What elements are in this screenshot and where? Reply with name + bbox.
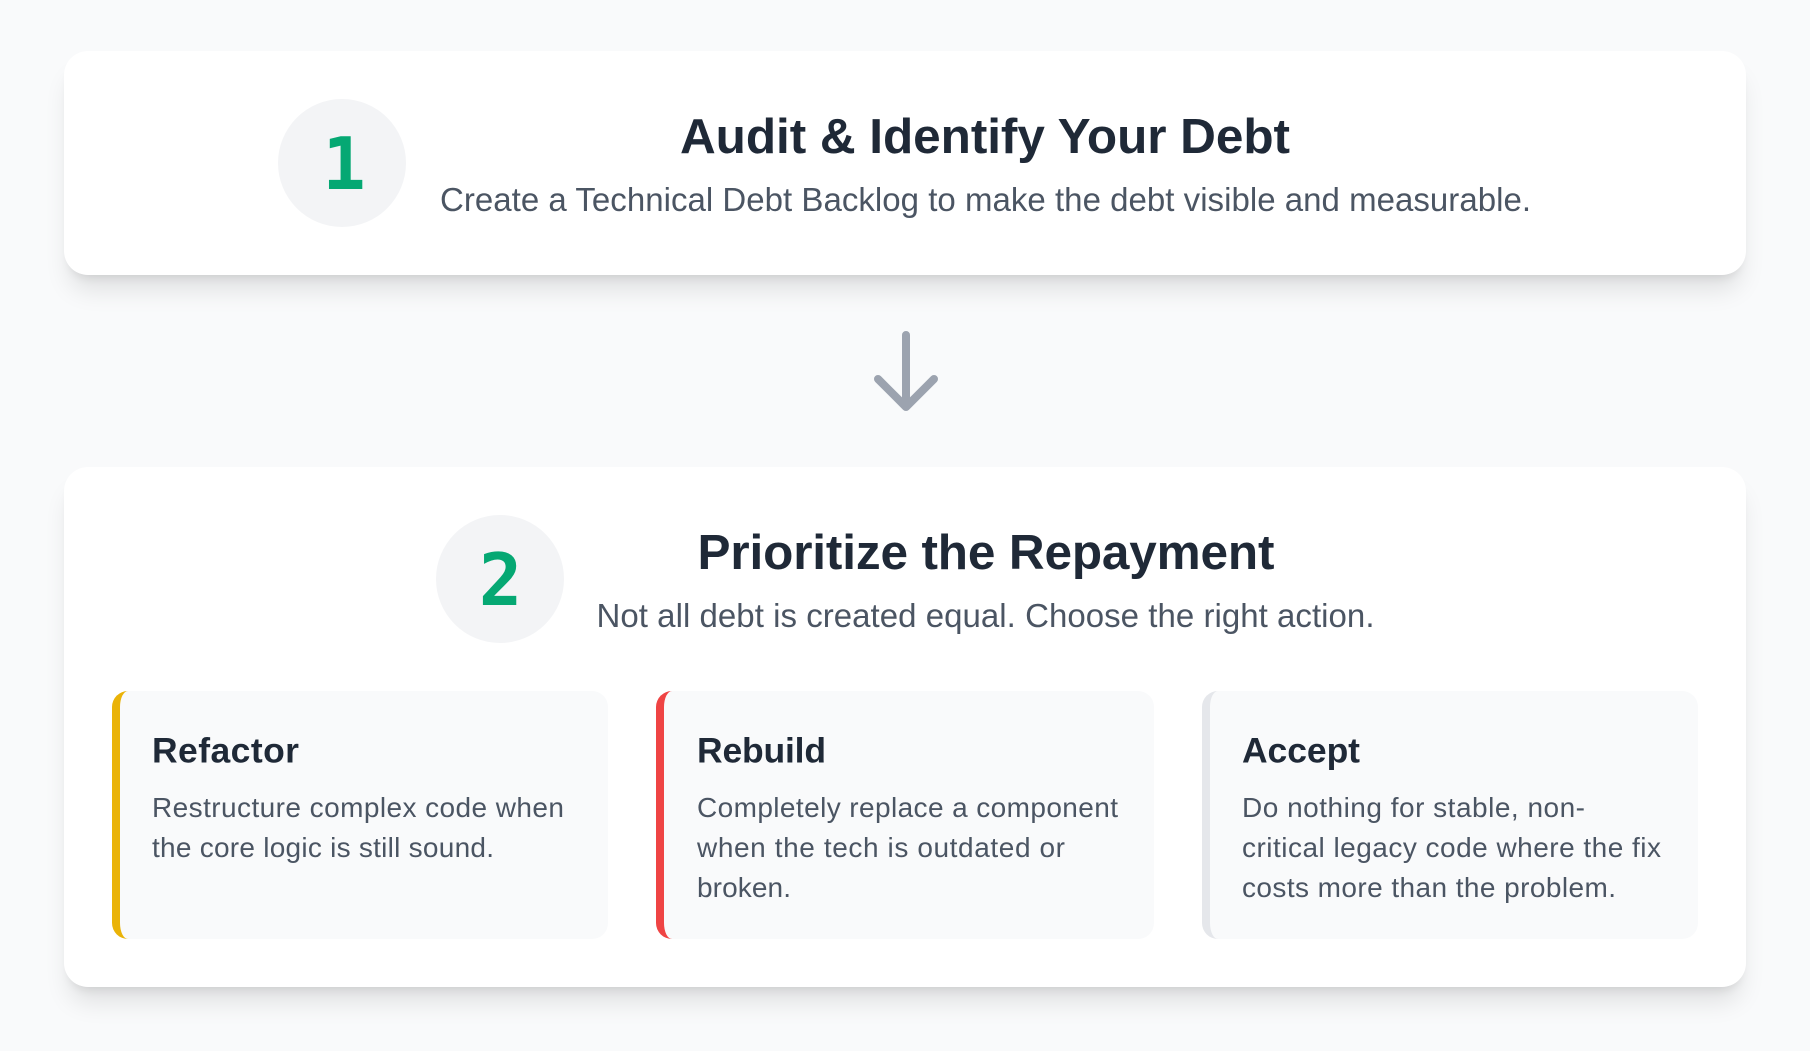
step 2 number badge bbox=[436, 515, 564, 643]
card: refactor bbox=[112, 691, 608, 939]
step 1 number badge: 1 bbox=[322, 122, 366, 206]
card heading: Accept: Accept bbox=[1242, 730, 1360, 770]
step 2 number badge: 2 bbox=[479, 538, 522, 622]
card body: refactor: the core logic is still sound. bbox=[152, 832, 494, 863]
heading: Audit & Identify Your Debt: Audit & Identify Your Debt bbox=[680, 109, 1290, 164]
card body: refactor bbox=[152, 792, 564, 863]
card body: rebuild bbox=[696, 792, 1118, 903]
panel: step 2 prioritize the repayment bbox=[64, 467, 1746, 987]
card body: refactor: Restructure complex code when bbox=[152, 792, 564, 823]
card body: rebuild: Completely replace a component bbox=[697, 792, 1118, 823]
card body: accept: Do nothing for stable, non- bbox=[1242, 792, 1585, 823]
text: step 2 description: Not all debt is created equal. Choose the right action. bbox=[596, 597, 1374, 634]
heading: Prioritize the Repayment: Prioritize the Repayment bbox=[698, 525, 1274, 580]
card heading: Rebuild: Rebuild bbox=[697, 730, 826, 770]
card body: accept bbox=[1242, 792, 1661, 903]
card: accept bbox=[1202, 691, 1698, 939]
step 1 number badge bbox=[278, 99, 406, 227]
card: rebuild bbox=[656, 691, 1154, 939]
card body: accept: critical legacy code where the fix bbox=[1242, 832, 1661, 863]
text: step 1 description: Create a Technical Debt Backlog to make the debt visible and measurable. bbox=[440, 181, 1531, 218]
card body: rebuild: when the tech is outdated or bbox=[696, 832, 1065, 863]
card body: rebuild: broken. bbox=[697, 872, 791, 903]
card heading: Refactor: Refactor bbox=[152, 730, 299, 770]
card body: accept: costs more than the problem. bbox=[1242, 872, 1616, 903]
arrow: down from step 1 to step 2 bbox=[874, 331, 938, 411]
panel: step 1 audit and identify bbox=[64, 51, 1746, 275]
